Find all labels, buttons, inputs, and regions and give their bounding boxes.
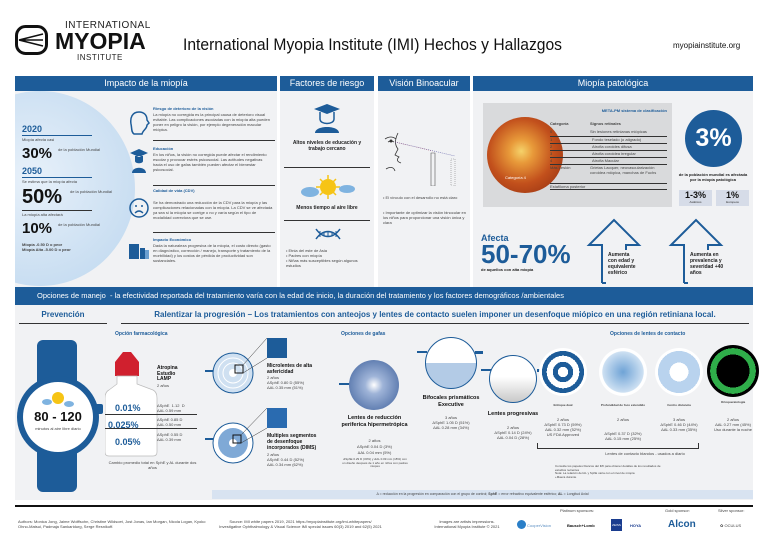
footer: images note: Images are artists impressions.: [439, 519, 495, 524]
panel: visión binocular: • Importante de optimizar la visión binocular en los niños para proporcionar una visión única y clara: [383, 210, 466, 225]
atropine bottle: 0.025%: [108, 420, 139, 430]
stats: de la población Mundial: [58, 147, 100, 152]
fundus and classification table: Fondo teselado (o atigrado): [592, 137, 641, 142]
afecta 50-70%: 50-70%: [481, 239, 571, 269]
prevalence boxes: Asiáticos: [689, 200, 702, 204]
lens: DIMS: Multiples segmentos: [267, 433, 316, 439]
fundus and classification table: [483, 103, 672, 207]
panel: miopía patológica: de la población mundial es afectada por la miopía patológica: [679, 172, 747, 182]
legend strip: Δ = reducción en la progresión en comparación con el grupo de control; SphE = error refractivo equivalente esférico; AL = Longitud Axial: [376, 492, 588, 496]
icon: face and pencils: [384, 132, 456, 186]
stats: 10%: [22, 220, 52, 237]
prevalence boxes: [679, 190, 712, 206]
lens: bifocales: 3 años: [445, 415, 457, 420]
footer: images note: [434, 519, 500, 529]
contact lenses: ΔSphE 0.46 D (44%): [660, 422, 698, 427]
contact lenses: 2 años: [617, 417, 629, 422]
panel: visión binocular: [378, 76, 470, 287]
atropine bottle: ΔAL 0.50 mm: [157, 422, 181, 427]
afecta 50-70%: Afecta: [481, 233, 509, 243]
fundus and classification table: Estafiloma posterior: [550, 184, 585, 189]
atropine bottle: 2 años: [157, 383, 169, 388]
lens: progresivas: [481, 355, 540, 440]
contact lenses: Ortoqueratología: [721, 400, 745, 404]
lens: bifocales: ΔSphE 1.05 D (51%): [432, 420, 470, 425]
risk items: Educación: [153, 146, 173, 151]
panel: miopía patológica: Miopía patológica: [578, 78, 648, 88]
icon: graduate: [314, 104, 340, 133]
footer: source: Source: IMI white papers 2019, 2021 https://myopiainstitute.org/imi-whitepapers/: [229, 519, 372, 524]
stats: Miopía -0.50 D o peor: [22, 242, 62, 247]
lens: DIMS: 2 años: [267, 452, 279, 457]
lens: progresivas: 2 años: [507, 425, 519, 430]
panel: visión binocular: • El vínculo con el desarrollo no está claro: [383, 195, 457, 200]
contact lenses: ΔAL 0.27 mm (45%): [715, 422, 751, 427]
heading: ralentizar: [121, 310, 749, 324]
atropine bottle: Estudio: [157, 370, 175, 376]
contact lenses: Uso durante la noche: [714, 427, 752, 432]
stats: Se estima que la miopía afecta: [22, 179, 77, 184]
sponsors: ✿ OCULUS: [720, 523, 741, 528]
panel: miopía patológica: equivalente: [608, 264, 636, 270]
fundus and classification table: 3: [550, 151, 552, 156]
panel: management: ΔAL 0.28 mm (34%): [433, 425, 469, 430]
fundus and classification table: Sin lesiones retinianas miópicas: [590, 129, 647, 134]
contact lenses: Enfoque dual: [554, 403, 572, 407]
stats: [22, 124, 112, 252]
heading: prevención: Prevención: [41, 310, 85, 319]
arrow: age: [586, 218, 642, 284]
contact lenses: ΔSphE 0.73 D (59%): [544, 422, 582, 427]
stats: de la población Mundial: [58, 222, 100, 227]
note: +Maera durante: [555, 474, 576, 478]
atropine bottle: 0.01%: [115, 403, 141, 413]
risk items: Impacto Económico: [153, 237, 191, 242]
sponsors: Alcon: [668, 519, 696, 530]
contact lenses: 2 años: [557, 417, 569, 422]
atropine bottle: ΔSphE 1.12 D: [157, 403, 185, 408]
icon: sun and clouds: [301, 175, 355, 199]
heading: ralentizar: Ralentizar la progresión – Los tratamientos con anteojos y lentes de contacto suelen imponer un desenfoque miópico en una región retiniana local.: [154, 310, 716, 319]
section header: opciones de manejo: [15, 287, 753, 305]
panel: factores de riesgo: Altos niveles de educación y trabajo cercano: [293, 140, 361, 152]
note: [555, 464, 661, 478]
panel: miopía patológica: Aumenta: [608, 252, 629, 258]
footer line: [15, 505, 753, 506]
lens: DIMS: ΔSphE 0.44 D (52%): [267, 457, 304, 462]
heading: opciones de gafas: Opciones de gafas: [341, 331, 385, 337]
icon: DNA: [315, 228, 341, 240]
sponsors: Gold sponsor:: [665, 508, 690, 513]
contact lenses: ΔAL 0.32 mm (52%): [545, 427, 581, 432]
fundus and classification table: 2: [550, 144, 552, 149]
fundus and classification table: META-PM sistema de clasificación: [602, 108, 667, 113]
contact lenses: Profundidad de foco extendido: [601, 403, 645, 407]
section header: opciones de manejo: Opciones de manejo - la efectividad reportada del tratamiento varía con la edad de inicio, la duración del tratamiento y los factores demográficos /ambientales: [37, 291, 564, 300]
panel: miopía patológica: con edad y: [608, 258, 634, 264]
lens: DIMS: ΔAL 0.34 mm (62%): [267, 462, 303, 467]
fundus and classification table: 0: [550, 129, 552, 134]
logo: MYOPIA: [55, 28, 146, 54]
stats: 2050: [22, 166, 42, 176]
lens: progresivas: ΔSphE 0.14 D (24%): [494, 430, 532, 435]
panel: miopía patológica: prevalencia y: [690, 258, 722, 264]
lens: hipermetrópica: ΔSphE 0.29 D (30%) y ΔAL 0.09 mm (18%) con un diseño después de 1 año en niños con padres miopes: [342, 457, 408, 468]
logo: INTERNATIONAL: [65, 20, 151, 31]
lens: microlentes: Microlentes de alta: [267, 363, 312, 369]
sponsors: [517, 508, 744, 531]
globe: [0, 91, 135, 286]
stats: 50%: [22, 186, 62, 208]
stats: Miopía afecta casi: [22, 137, 54, 142]
risk items: Riesgo de deterioro de la visión: [153, 106, 213, 111]
risk items: [129, 106, 275, 263]
watch: [17, 340, 103, 492]
lens: microlentes: ΔAL 0.35 mm (51%): [267, 385, 303, 390]
atropine bottle: Atropina: [157, 365, 178, 371]
contact lenses: 3 años: [673, 417, 685, 422]
stats: Miopía Alta -5.00 D o peor: [22, 247, 71, 252]
footer: source: Investigative Ophthalmology & Visual Science IMI special issues 60(3) 2019 and 62(5) 2021: [219, 524, 382, 529]
panel: management: Lentes de contacto blandos - usados a diario: [605, 451, 685, 456]
panel: factores de riesgo: [280, 76, 374, 287]
lens: microlentes: [205, 338, 312, 394]
fundus and classification table: Categoría: [550, 121, 568, 126]
footer: source: [219, 519, 382, 529]
risk items: Calidad de vida (CDV): [153, 188, 195, 193]
atropine bottle: ΔAL 0.39 mm: [157, 437, 181, 442]
fundus and classification table: Más Lesión: [550, 165, 570, 170]
fundus and classification table: Atrofia Macular: [592, 158, 619, 163]
risk items: Se ha demostrado una reducción de la CDV para la miopía y las complicaciones relacionadas con la miopía. La CDV se ve afectada ya sea si la miopía se corrige o no y varía según el tipo de modalidad correctora que se use.: [153, 200, 272, 220]
lens: hipermetrópica: [339, 360, 408, 468]
atropine bottle: ΔSphE 0.55 D: [157, 432, 182, 437]
risk items: En los niños, la visión no corregida puede afectar el rendimiento escolar y provocar estrés psicosocial. Las actitudes negativas hacia el uso de gafas también pueden afectar el bienestar psicosocial.: [153, 152, 267, 172]
contact lenses: ΔAL 0.15 mm (25%): [605, 436, 641, 441]
sponsors: Platinum sponsors:: [560, 508, 594, 513]
panel: impacto de la miopía: [15, 76, 277, 287]
lens: DIMS: [205, 408, 316, 467]
lens: microlentes: 2 años: [267, 375, 279, 380]
watch: minutos al aire libre diario: [35, 426, 81, 431]
panel: factores de riesgo: • Niñas más susceptibles según algunos estudios: [286, 258, 358, 268]
panel: miopía patológica: 1%: [726, 190, 739, 200]
3% globe: [685, 110, 742, 167]
heading: opción farmacológica: Opción farmacológica: [115, 331, 168, 337]
panel: miopía patológica: severidad +40: [690, 264, 723, 270]
atropine bottle: ΔSphE 0.85 D: [157, 417, 182, 422]
lens: DIMS: de desenfoque: [267, 439, 302, 445]
sponsors: Bausch+Lomb: [567, 523, 595, 528]
stats: 30%: [22, 145, 52, 162]
fundus and classification table: 4: [550, 158, 552, 163]
contact lenses: US FDA Approved: [547, 432, 579, 437]
sponsors: ZEISS: [612, 523, 621, 527]
lens: microlentes: ΔSphE 0.80 D (55%): [267, 380, 304, 385]
lens: bifocales: [417, 337, 483, 430]
panel: factores de riesgo: Factores de riesgo: [290, 78, 364, 88]
sponsors: CooperVision: [527, 523, 551, 528]
fundus and classification table: Atrofia coroides difusa: [592, 144, 632, 149]
website: myopiainstitute.org: [673, 41, 740, 50]
sponsors: Silver sponsor:: [718, 508, 744, 513]
panel: miopía patológica: años: [690, 270, 702, 276]
footer: authors: Authors: Monica Jong, Jaime Wolffsohn, Christine Wildsoet, Jost Jonas, Ian Morgan, Nicola Logan, Kyoko Ohno-Matsui, Padmaja Sankaridurg, Serge Resnikoff.: [18, 519, 206, 529]
risk items: Dada la naturaleza progresiva de la miopía, el costo directo (gasto en diagnóstico, corrección / manejo, transporte y tratamiento de la morbilidad) y los costos de pérdida de productividad son sustanciales.: [153, 243, 271, 263]
lens: DIMS: incorporados (DIMS): [267, 445, 316, 451]
panel: miopía patológica: esférico: [608, 270, 627, 276]
lens: hipermetrópica: ΔAL 0.04 mm (5%): [358, 450, 391, 455]
fundus and classification table: Atrofia coroidea irregular: [592, 151, 636, 156]
atropine bottle: [105, 352, 197, 470]
panel: miopía patológica: Aumenta en: [690, 252, 719, 258]
risk items: La miopía no corregida es la principal causa de deterioro visual evitable. Las complicaciones asociadas con la miopía alta pueden poner en peligro la visión, por ejemplo degeneración macular miópica.: [153, 112, 270, 132]
panel: factores de riesgo: • Etnia del este de Asia: [286, 248, 327, 253]
atropine bottle: Cambio promedio total en SphE y AL durante dos años: [109, 460, 196, 470]
contact lenses: Centro distancia: [667, 403, 691, 407]
lens: hipermetrópica: ΔSphE 0.04 D (3%): [357, 444, 392, 449]
stats: de la población Mundial: [70, 189, 112, 194]
lens: bifocales: Bifocales prismáticos Executive: [423, 395, 479, 408]
panel: impacto de la miopía: Impacto de la miopía: [104, 78, 188, 88]
lens: hipermetrópica: Lentes de reducción periferica hipermetrópica: [341, 415, 408, 428]
panel: management: [15, 305, 753, 500]
contact lenses: ΔAL 0.33 mm (35%): [661, 427, 697, 432]
note: Consulte los papeles blancos del IMI para obtener detalles de los resultados de estudios recientes: [555, 464, 661, 472]
logo: INSTITUTE: [77, 53, 123, 62]
contact lenses: ΔSphE 0.37 D (32%): [604, 431, 642, 436]
arrow: prevalence: [668, 218, 724, 284]
contact lenses: 2 años: [727, 417, 739, 422]
panel: factores de riesgo: • Padres con miopía: [286, 253, 322, 258]
heading: prevención: [19, 310, 107, 324]
panel: visión binocular: Visión Binoacular: [389, 78, 459, 88]
note: Nota: La relación del AL y SphE varía con el nivel de miopía: [555, 471, 635, 475]
sponsors: HOYA: [630, 523, 641, 528]
panel: miopía patológica: [473, 76, 753, 287]
fundus and classification table: Grietas Lacquer, neovascularización coroidea miópica, manchas de Fuchs: [590, 165, 656, 175]
panel: factores de riesgo: Menos tiempo al aire libre: [296, 205, 358, 211]
legend strip: [212, 490, 753, 499]
title: International Myopia Institute (IMI) Hechos y Hallazgos: [183, 35, 562, 54]
logo: [15, 20, 151, 62]
3% globe: 3%: [695, 124, 732, 152]
fundus and classification table: Signos retinales: [590, 121, 621, 126]
lens: progresivas: Lentes progresivas: [488, 411, 538, 417]
stats: 2020: [22, 124, 42, 134]
afecta 50-70%: de aquellos con alta miopía: [481, 267, 533, 272]
footer: images note: International Myopia Institute © 2021: [434, 524, 500, 529]
contact lenses: [537, 345, 759, 449]
fundus and classification table: 1: [550, 137, 552, 142]
heading: opciones de lentes de contacto: Opciones de lentes de contacto: [610, 331, 685, 337]
lens: progresivas: ΔAL 0.04 D (28%): [497, 435, 529, 440]
watch: 80 - 120: [34, 409, 82, 424]
prevalence boxes: 1-3%: [685, 190, 706, 200]
atropine bottle: 0.05%: [115, 437, 141, 447]
atropine bottle: ΔAL 0.59 mm: [157, 408, 181, 413]
fundus and classification table: Categoría 4: [505, 175, 526, 180]
lens: microlentes: asfericidad: [267, 369, 293, 375]
lens: hipermetrópica: 2 años: [368, 438, 380, 443]
stats: La miopía alta afectará: [22, 212, 63, 217]
atropine bottle: LAMP: [157, 376, 171, 382]
panel: miopía patológica: Europeos: [726, 200, 739, 204]
